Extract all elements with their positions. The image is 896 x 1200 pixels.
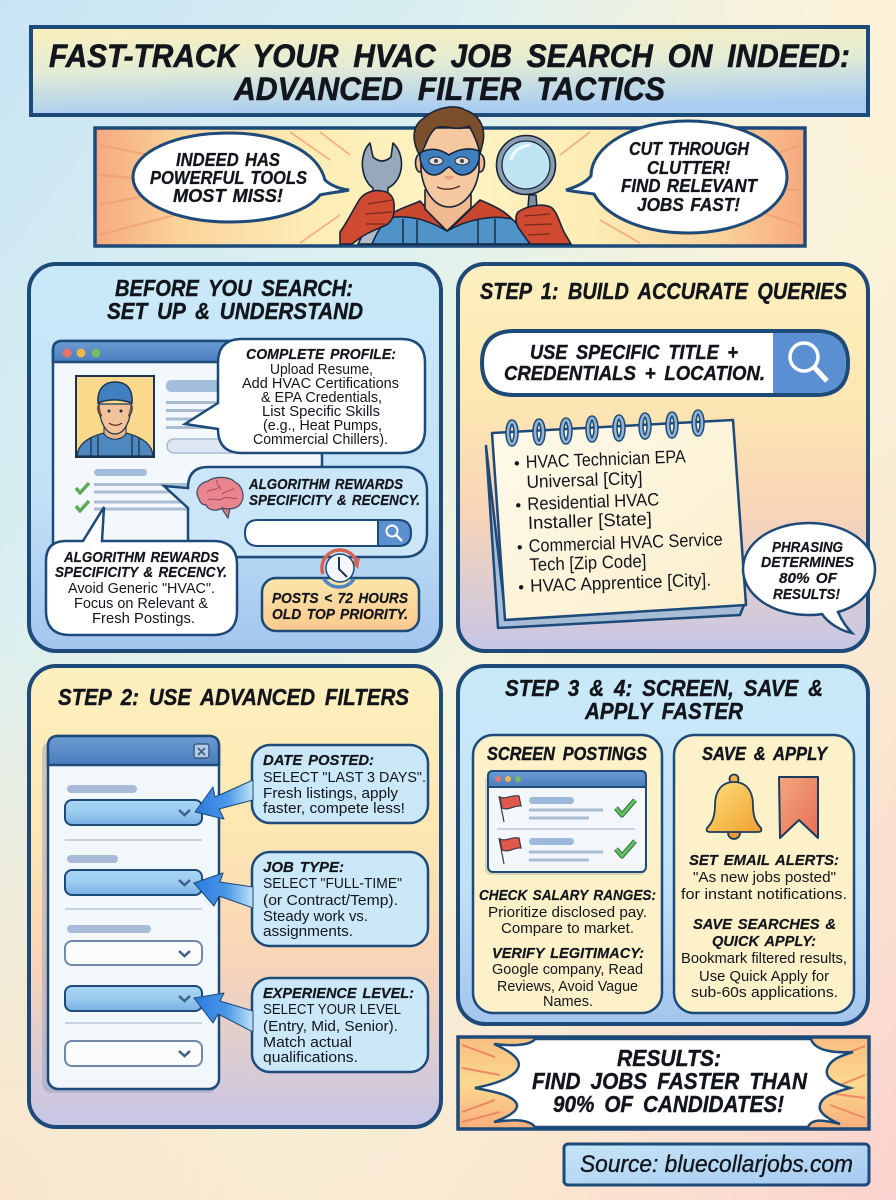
wrench bbox=[358, 143, 402, 244]
callout: algorithm with search box: ALGORITHM REWARDS bbox=[248, 477, 403, 493]
callout: posts under 72 hours: OLD TOP PRIORITY. bbox=[272, 607, 408, 623]
profile photo bbox=[76, 376, 154, 457]
heading: BEFORE YOU SEARCH: bbox=[115, 275, 353, 301]
icon: bell bbox=[707, 774, 761, 839]
callout: job type: SELECT "FULL-TIME" bbox=[263, 875, 402, 892]
arrow: job type bbox=[194, 873, 253, 908]
callout: posts under 72 hours: POSTS < 72 HOURS bbox=[272, 591, 408, 607]
sub-panel: save and apply: for instant notifications. bbox=[681, 886, 847, 903]
speech bubble: left bbox=[133, 133, 349, 222]
callout: date posted bbox=[252, 745, 428, 823]
arrow: date posted bbox=[195, 780, 253, 819]
callout: complete profile: Commercial Chillers). bbox=[253, 431, 388, 448]
callout: job type: JOB TYPE: bbox=[263, 860, 344, 876]
title banner: ADVANCED FILTER TACTICS bbox=[233, 71, 666, 107]
heading: APPLY FASTER bbox=[584, 698, 743, 724]
results banner: 90% OF CANDIDATES! bbox=[553, 1091, 784, 1117]
sub-panel: screen postings: Google company, Read bbox=[492, 961, 643, 978]
callout: experience level: qualifications. bbox=[263, 1049, 358, 1066]
panel: before you search bbox=[29, 264, 441, 651]
sub-panel: save and apply: QUICK APPLY: bbox=[712, 934, 816, 950]
magnifier handle bbox=[528, 195, 537, 208]
callout: date posted: DATE POSTED: bbox=[263, 753, 374, 769]
speech bubble: phrasing: DETERMINES bbox=[761, 555, 854, 571]
profile form lines bbox=[166, 380, 237, 453]
sub-panel: screen postings: SCREEN POSTINGS bbox=[487, 744, 647, 764]
sub-panel: save and apply: sub-60s applications. bbox=[691, 984, 838, 1001]
speech bubble: phrasing: 80% OF bbox=[779, 571, 838, 587]
callout: complete profile: & EPA Credentials, bbox=[261, 389, 382, 406]
source tag bbox=[564, 1144, 869, 1185]
panel: step 1 bbox=[458, 264, 875, 651]
speech bubble: right: JOBS FAST! bbox=[637, 195, 740, 215]
heading bbox=[505, 675, 823, 724]
callout: avoid generic: SPECIFICITY & RECENCY. bbox=[55, 565, 227, 581]
heading bbox=[107, 275, 363, 324]
speech bubble: right bbox=[566, 121, 787, 233]
sub-panel: screen postings: VERIFY LEGITIMACY: bbox=[492, 946, 644, 962]
callout: complete profile: (e.g., Heat Pumps, bbox=[263, 417, 382, 434]
filter fields bbox=[65, 785, 202, 1066]
speech bubble: left: MOST MISS! bbox=[173, 186, 283, 206]
sub-panel: screen postings: Compare to market. bbox=[501, 920, 634, 937]
callout: job type: (or Contract/Temp). bbox=[263, 892, 398, 909]
search bar: CREDENTIALS + LOCATION. bbox=[504, 363, 765, 385]
callout: experience level: EXPERIENCE LEVEL: bbox=[263, 986, 414, 1002]
sub-panel: save and apply: SAVE SEARCHES & bbox=[693, 917, 836, 933]
search bar bbox=[482, 331, 848, 395]
browser window bbox=[53, 341, 322, 557]
sub-panel: screen postings: Reviews, Avoid Vague bbox=[497, 978, 638, 995]
filter window bbox=[42, 736, 219, 1093]
hero banner bbox=[95, 107, 805, 246]
results banner bbox=[458, 1037, 869, 1129]
callout: posts under 72 hours bbox=[262, 578, 419, 631]
cape bbox=[390, 200, 520, 232]
search bar: USE SPECIFIC TITLE + bbox=[530, 342, 738, 364]
sub-panel: save and apply: Use Quick Apply for bbox=[699, 968, 829, 985]
callout: avoid generic bbox=[46, 507, 237, 635]
source tag: Source: bluecollarjobs.com bbox=[580, 1151, 853, 1178]
callout: experience level: (Entry, Mid, Senior). bbox=[263, 1018, 398, 1035]
mini browser bbox=[485, 771, 646, 875]
suit bbox=[372, 217, 530, 244]
query list: Commercial HVAC Service bbox=[528, 529, 723, 556]
speech bubble: left: INDEED HAS bbox=[176, 150, 280, 170]
hair bbox=[414, 107, 484, 156]
heading: STEP 2: USE ADVANCED FILTERS bbox=[58, 684, 410, 710]
right glove bbox=[516, 205, 571, 244]
sub-panel: screen postings: Names. bbox=[543, 993, 593, 1010]
speech bubble: phrasing: RESULTS! bbox=[773, 587, 840, 603]
query list: HVAC Apprentice [City]. bbox=[530, 570, 711, 596]
speech bubble: right: CLUTTER! bbox=[647, 158, 730, 178]
mask bbox=[420, 149, 479, 175]
callout: experience level: SELECT YOUR LEVEL bbox=[263, 1001, 401, 1018]
sub-panel: screen postings bbox=[473, 735, 662, 1013]
speech bubble: left: POWERFUL TOOLS bbox=[150, 168, 307, 188]
callout: complete profile bbox=[185, 339, 425, 453]
sub-panel: save and apply bbox=[674, 735, 854, 1013]
speech bubble: right: CUT THROUGH bbox=[629, 139, 750, 159]
heading: STEP 3 & 4: SCREEN, SAVE & bbox=[505, 675, 823, 701]
results banner: FIND JOBS FASTER THAN bbox=[532, 1068, 807, 1094]
callout: avoid generic: Fresh Postings. bbox=[92, 610, 195, 627]
sub-panel: screen postings: CHECK SALARY RANGES: bbox=[479, 888, 656, 904]
panel: step 3 and 4 bbox=[458, 666, 868, 1024]
sub-panel: save and apply: Bookmark filtered results, bbox=[681, 950, 847, 967]
list lines bbox=[529, 797, 574, 804]
spiral binding bbox=[508, 412, 702, 444]
query list: Installer [State] bbox=[528, 509, 652, 533]
icon: bookmark bbox=[779, 777, 818, 838]
flags bbox=[499, 796, 521, 822]
sub-panel: save and apply: "As new jobs posted" bbox=[693, 869, 836, 886]
callout: complete profile: COMPLETE PROFILE: bbox=[246, 347, 396, 363]
sub-panel: save and apply: SET EMAIL ALERTS: bbox=[689, 853, 839, 869]
callout: avoid generic: Avoid Generic "HVAC". bbox=[68, 580, 215, 597]
smile bbox=[437, 186, 460, 189]
speech bubble: phrasing bbox=[743, 523, 875, 633]
heading: SET UP & UNDERSTAND bbox=[107, 298, 363, 324]
query list: Tech [Zip Code] bbox=[529, 551, 647, 575]
ears and face bbox=[416, 154, 424, 172]
checklist bbox=[76, 469, 187, 511]
callout: date posted: faster, compete less! bbox=[263, 800, 405, 817]
callout: complete profile: Add HVAC Certifications bbox=[242, 375, 399, 392]
sub-panel: save and apply: SAVE & APPLY bbox=[702, 744, 829, 764]
neck bbox=[425, 190, 471, 231]
icon: clock bbox=[322, 550, 360, 587]
panel: step 2 bbox=[29, 666, 441, 1127]
checks bbox=[616, 800, 635, 856]
burst bbox=[475, 1039, 853, 1127]
callout: job type bbox=[252, 852, 428, 946]
results banner: RESULTS: bbox=[617, 1045, 721, 1071]
sub-panel: screen postings: Prioritize disclosed pay. bbox=[488, 904, 647, 921]
callout: complete profile: Upload Resume, bbox=[270, 361, 373, 378]
heading: STEP 1: BUILD ACCURATE QUERIES bbox=[480, 278, 848, 304]
title banner bbox=[31, 27, 868, 115]
callout: job type: assignments. bbox=[263, 923, 353, 940]
callout: complete profile: List Specific Skills bbox=[262, 403, 380, 420]
search box bbox=[245, 520, 411, 546]
icon: superhero technician bbox=[340, 107, 571, 244]
arrow: experience level bbox=[194, 993, 253, 1032]
title banner: FAST-TRACK YOUR HVAC JOB SEARCH ON INDEED: bbox=[49, 38, 850, 74]
query list: Universal [City] bbox=[526, 468, 643, 492]
speech bubble: phrasing: PHRASING bbox=[772, 540, 843, 556]
query list: Residential HVAC bbox=[527, 489, 660, 514]
callout: algorithm with search box bbox=[164, 467, 427, 557]
icon: brain bbox=[197, 477, 243, 518]
callout: date posted: Fresh listings, apply bbox=[263, 785, 399, 802]
callout: algorithm with search box: SPECIFICITY & RECENCY. bbox=[249, 493, 420, 509]
callout: date posted: SELECT "LAST 3 DAYS". bbox=[263, 769, 426, 786]
callout: job type: Steady work vs. bbox=[263, 908, 368, 925]
left glove bbox=[340, 191, 394, 244]
callout: avoid generic: ALGORITHM REWARDS bbox=[63, 550, 219, 566]
icon: magnifier bbox=[790, 343, 827, 381]
query list bbox=[514, 445, 724, 596]
close button bbox=[194, 744, 209, 758]
speech bubble: right: FIND RELEVANT bbox=[621, 176, 759, 196]
magnifier bbox=[496, 136, 556, 194]
callout: avoid generic: Focus on Relevant & bbox=[74, 595, 208, 612]
notepad bbox=[486, 412, 746, 628]
callout: experience level: Match actual bbox=[263, 1034, 352, 1051]
callout: experience level bbox=[252, 978, 428, 1072]
query list: HVAC Technician EPA bbox=[525, 446, 686, 472]
